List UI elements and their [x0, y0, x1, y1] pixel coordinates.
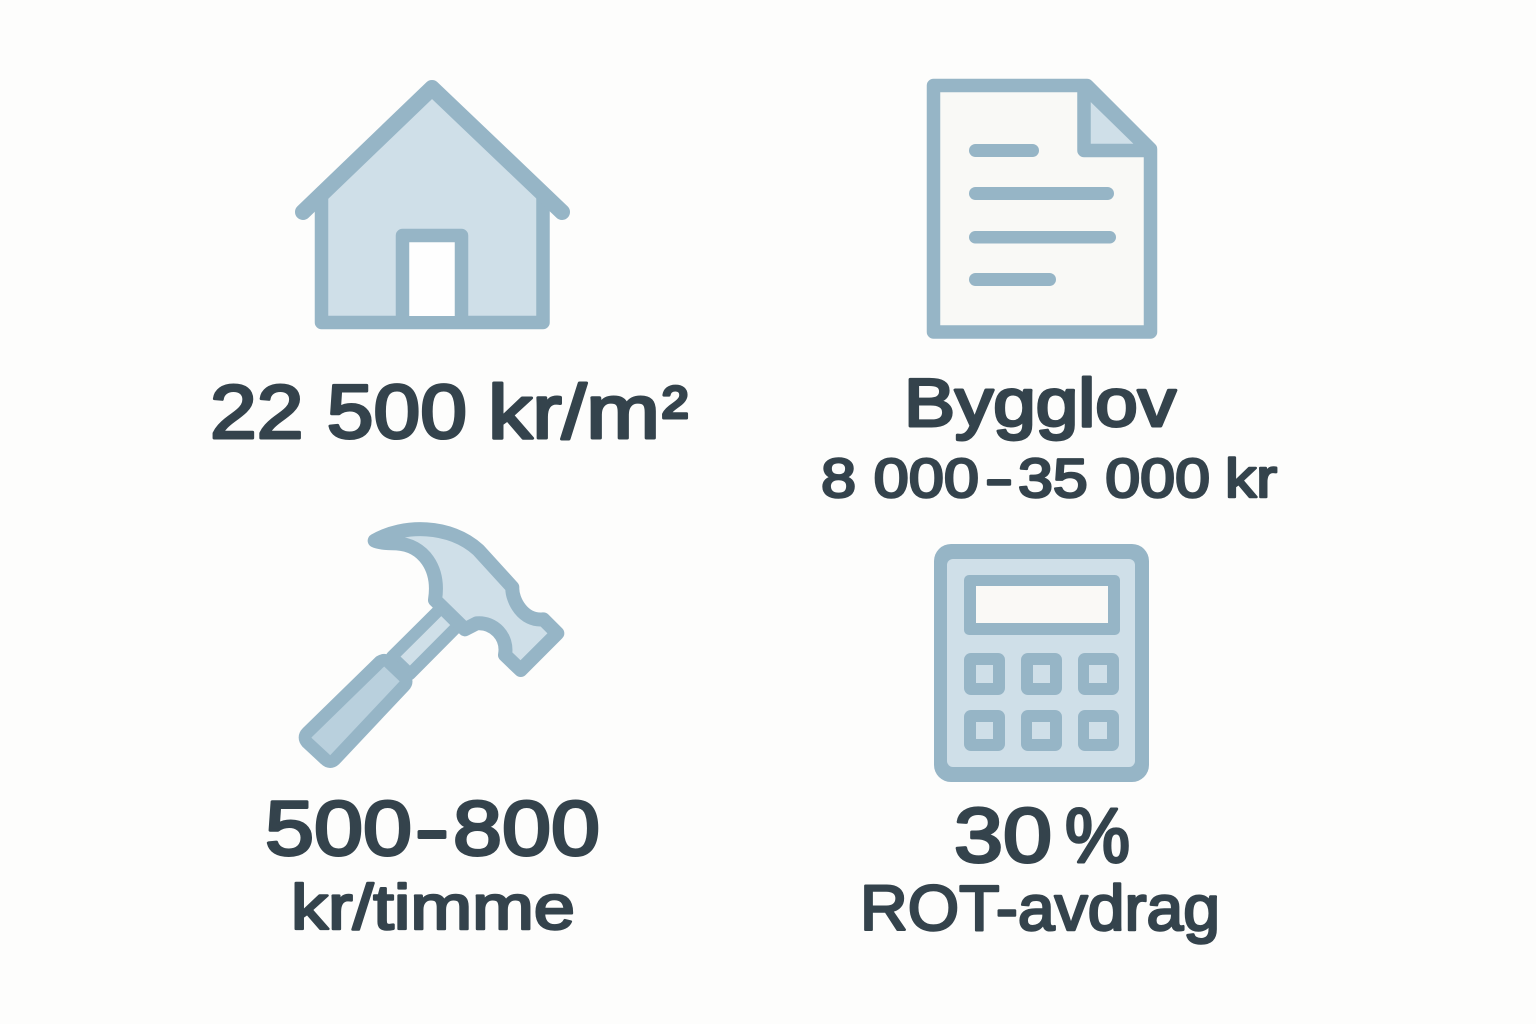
value: 30 percent: 30 [954, 793, 1052, 879]
value: hourly rate: 500 [265, 786, 412, 872]
panel: labour cost [265, 529, 600, 943]
value: 30 percent: % [1065, 793, 1130, 879]
label: permit cost range: kr [1225, 447, 1277, 509]
value: hourly rate: 800 [453, 786, 600, 872]
icon: house [303, 88, 562, 322]
panel: building permit [821, 86, 1277, 509]
label: price per square metre: 22 500 [210, 370, 467, 455]
label: permit cost range: 8 000 [821, 447, 979, 509]
panel: ROT deduction [860, 544, 1220, 944]
label: price per square metre: kr/m [488, 370, 660, 455]
label: kr per hour: kr/timme [291, 873, 575, 943]
label: ROT deduction: ROT-avdrag [860, 872, 1220, 944]
label: permit cost range: - [985, 447, 1013, 509]
icon: hammer [305, 529, 557, 762]
label: permit cost range: 35 000 [1018, 447, 1210, 509]
icon: calculator [934, 544, 1149, 782]
panel: house price [210, 88, 688, 456]
label: price per square metre: ² [662, 371, 688, 456]
value: hourly rate: - [415, 786, 449, 872]
heading: Bygglov: Bygglov [904, 365, 1176, 441]
icon: document [934, 86, 1150, 332]
